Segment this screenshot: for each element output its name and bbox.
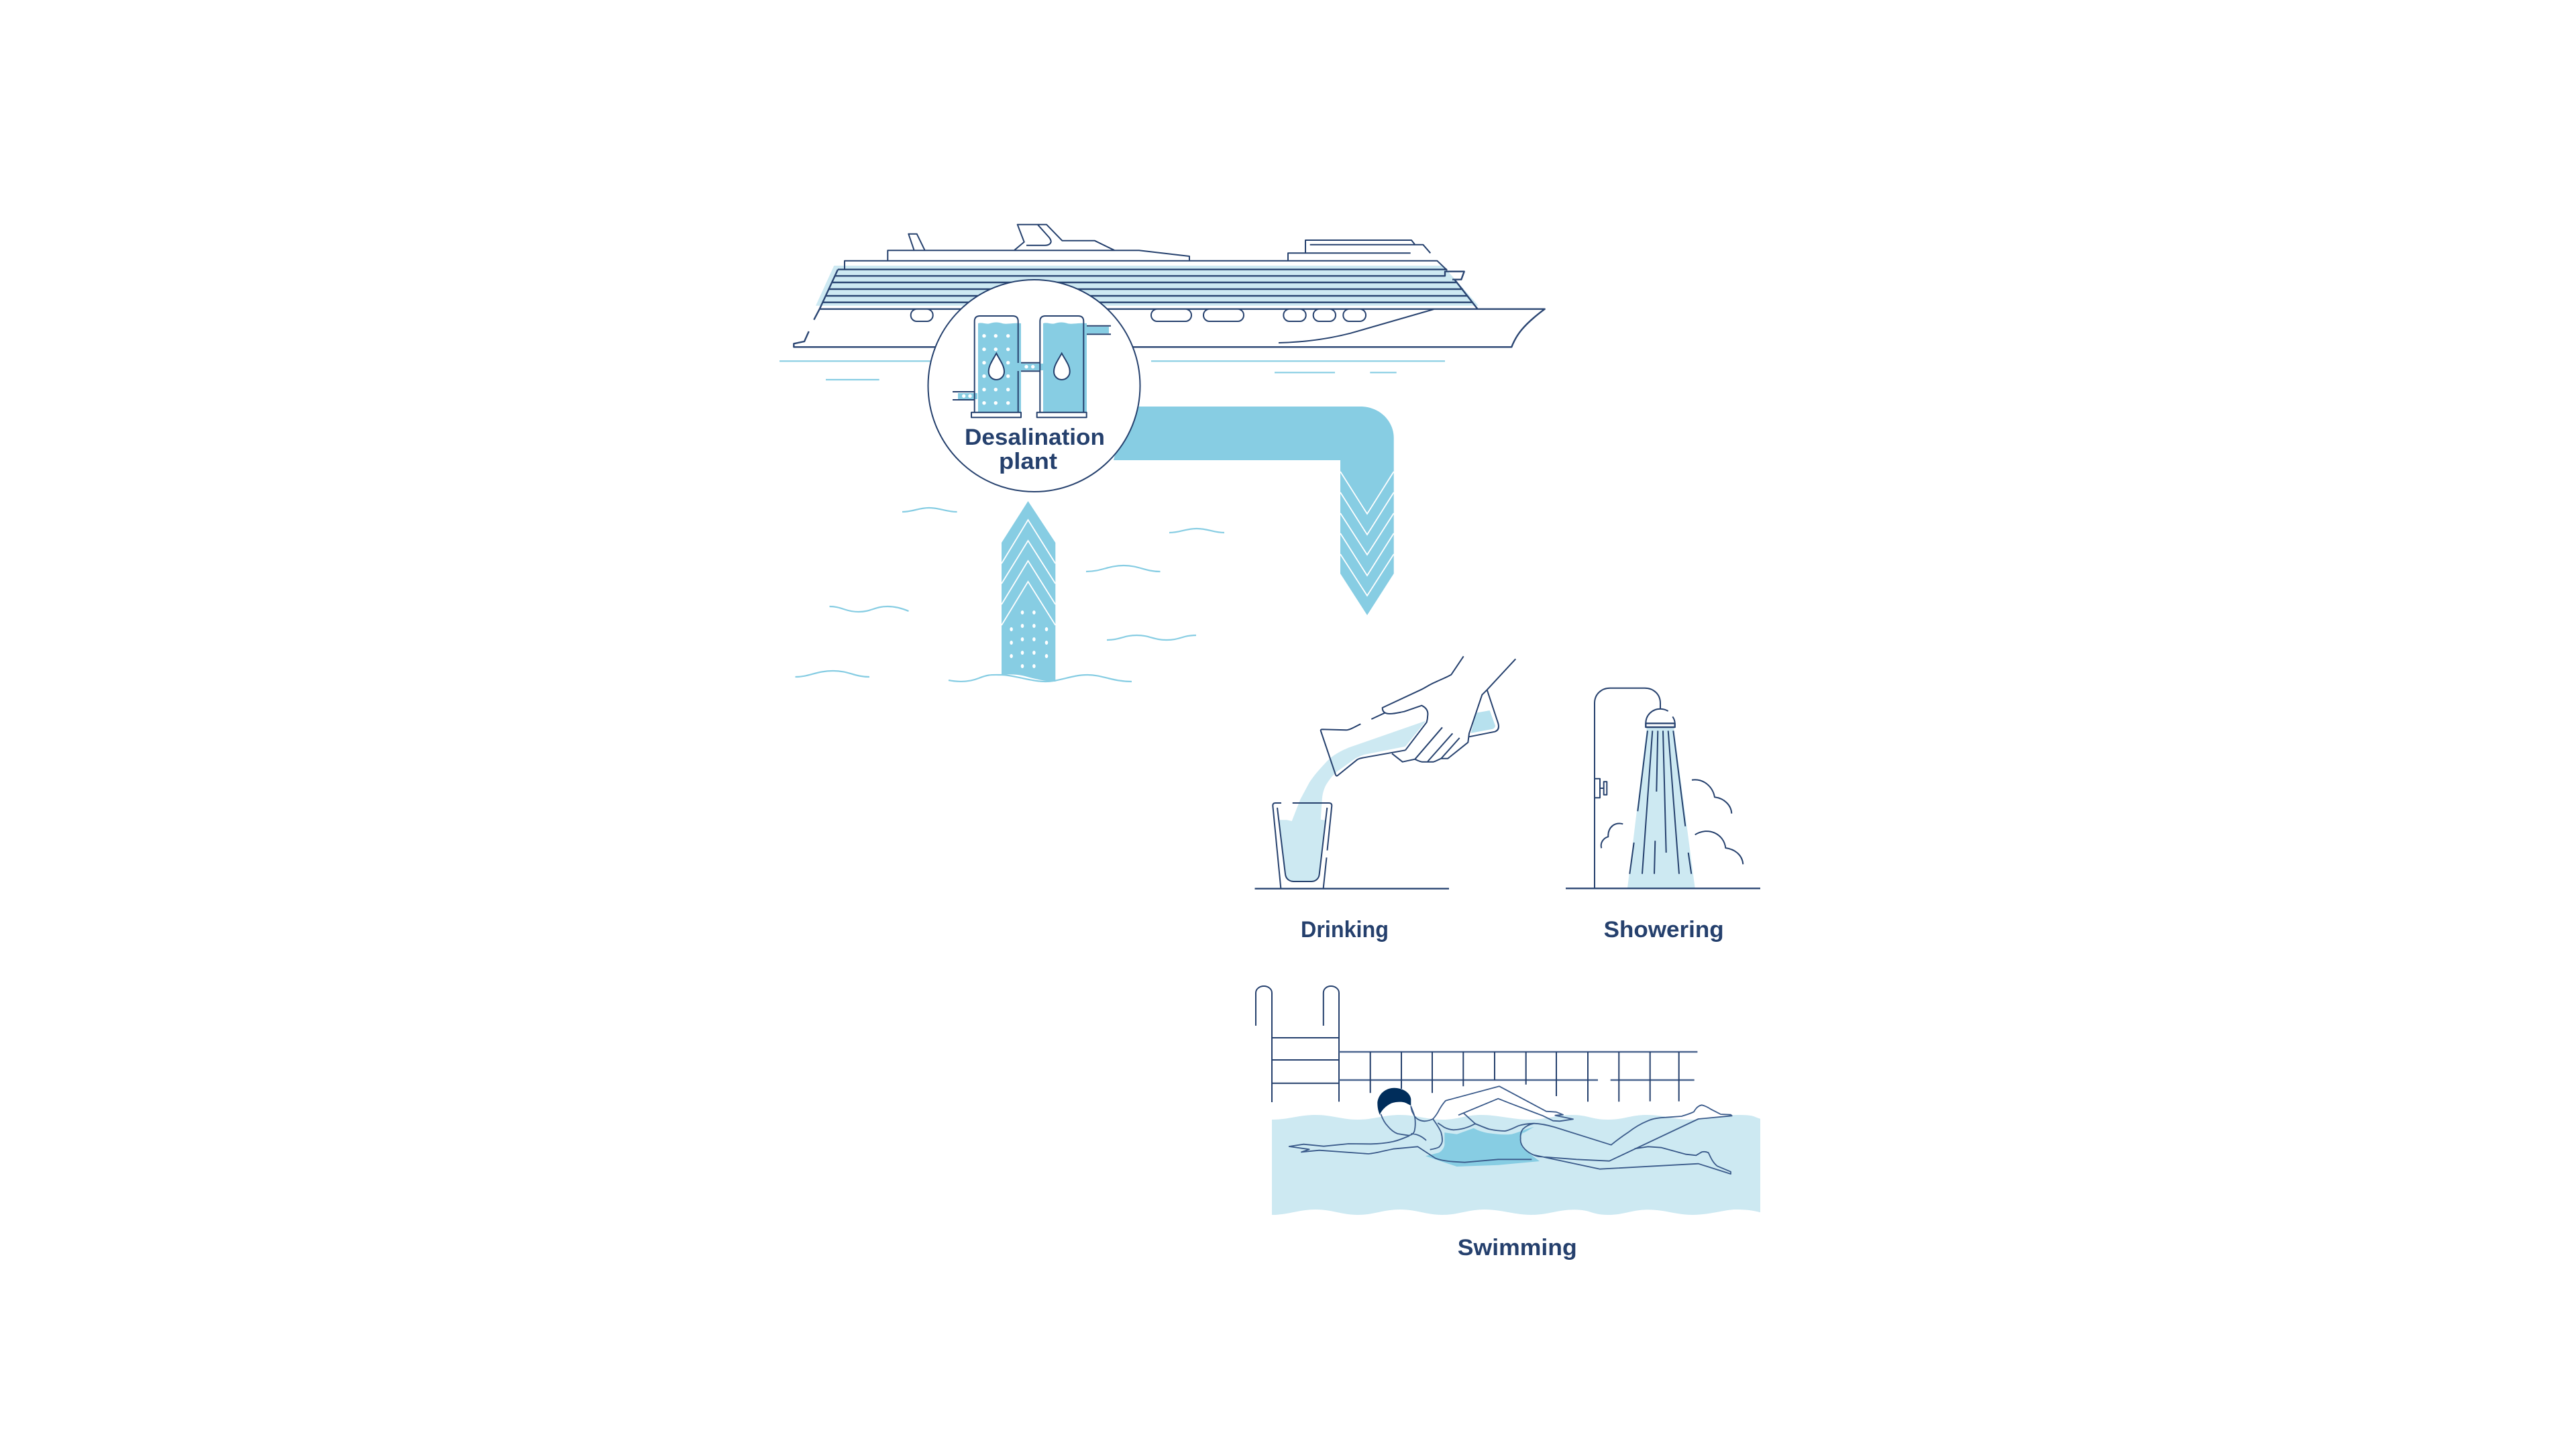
rail posts xyxy=(1371,1052,1679,1102)
spray lines xyxy=(1629,731,1691,874)
label: plant: plant xyxy=(999,449,1057,474)
sea lines xyxy=(780,361,1445,380)
upper decks xyxy=(845,225,1447,270)
cruise ship xyxy=(794,225,1545,347)
ship hull xyxy=(794,270,1545,347)
swimmer outline xyxy=(1289,1086,1732,1174)
deck lines xyxy=(823,270,1478,309)
shower head xyxy=(1646,709,1675,723)
chevrons on intake xyxy=(1002,520,1055,625)
label: desalination plant: Desalination xyxy=(965,425,1105,450)
swimsuit xyxy=(1426,1127,1540,1167)
hand and jug xyxy=(1321,656,1515,776)
jug water xyxy=(1471,710,1495,733)
pipe: seawater intake xyxy=(1002,501,1055,682)
ground line xyxy=(1566,888,1760,890)
pool rails xyxy=(1339,1052,1697,1080)
steam xyxy=(1601,780,1743,864)
shower spray fill xyxy=(1627,727,1695,888)
chevrons on down pipe xyxy=(1340,472,1394,596)
drinking illustration xyxy=(1254,656,1515,889)
salt dots xyxy=(1010,610,1048,668)
label: showering: Showering xyxy=(1604,917,1724,943)
label: swimming: Swimming xyxy=(1458,1235,1577,1260)
water drop 1 xyxy=(989,354,1004,380)
water stream and glass water xyxy=(1279,720,1426,881)
pipe: fresh water out xyxy=(1114,407,1394,615)
tank 1 water xyxy=(978,322,1021,412)
tank 2 water xyxy=(1043,322,1087,412)
pool water xyxy=(1272,1115,1760,1215)
bow line xyxy=(1279,309,1434,343)
label: drinking: Drinking xyxy=(1301,917,1389,943)
water drop 2 xyxy=(1054,354,1070,380)
panel: desalination plant circle xyxy=(928,280,1140,492)
tank bases xyxy=(971,413,1021,417)
showering illustration xyxy=(1566,688,1760,888)
ground line xyxy=(1254,888,1449,890)
ship windows xyxy=(911,309,1366,321)
swimming illustration xyxy=(1256,986,1760,1215)
pipes outline xyxy=(953,326,1111,400)
connecting pipe water xyxy=(958,393,977,399)
swimming cap xyxy=(1377,1088,1411,1115)
pool ladder xyxy=(1256,986,1339,1102)
glass xyxy=(1273,803,1332,888)
sea waves xyxy=(796,508,1224,682)
tanks outline xyxy=(975,316,1083,412)
shower pipe xyxy=(1595,688,1660,888)
ship deck band xyxy=(816,266,1479,306)
valve xyxy=(1595,779,1607,798)
salt dots in tank xyxy=(962,334,1034,405)
